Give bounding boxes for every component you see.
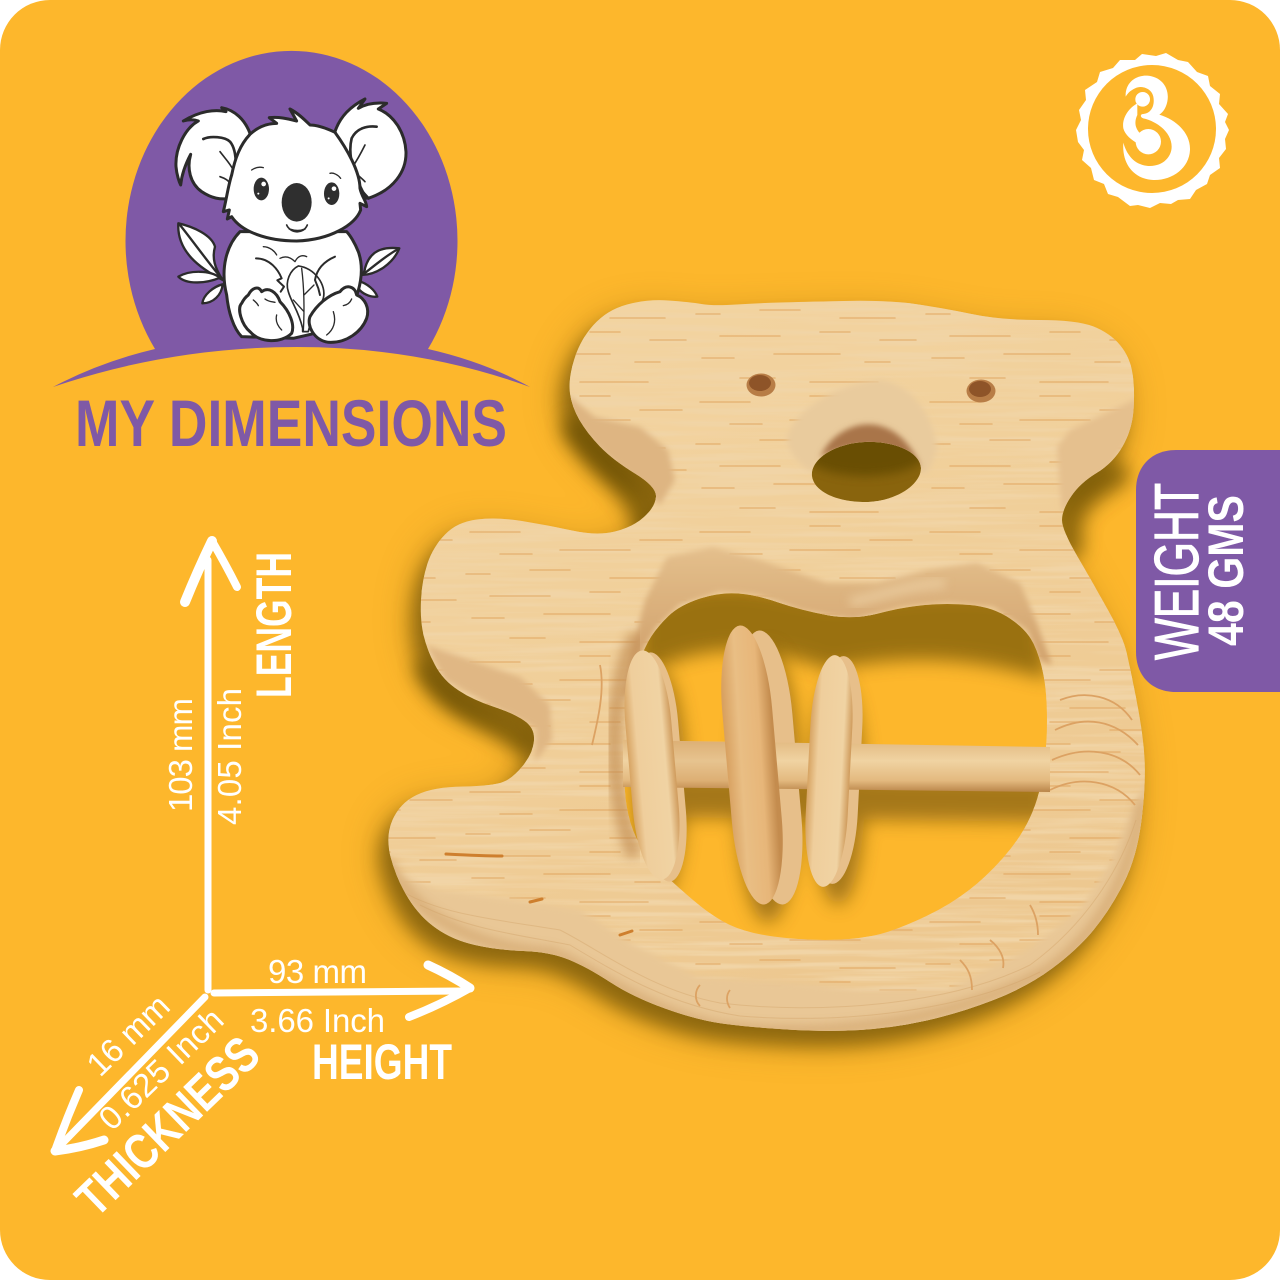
right ear: [335, 99, 406, 198]
grain dashes: [388, 309, 1142, 991]
mouth: [287, 225, 307, 232]
hole top wall highlight: [850, 583, 945, 602]
wood surface details: [380, 295, 1165, 1050]
lower rim wall: [390, 786, 1144, 1031]
label: height: HEIGHT: [312, 1034, 452, 1090]
value: 103 mm: 103 mm: [162, 698, 199, 812]
disc middle: [715, 623, 789, 907]
value: 4.05 Inch: 4.05 Inch: [211, 688, 248, 825]
logo numeral mark: [1123, 76, 1190, 180]
body: [224, 232, 361, 338]
dark grain marks: [446, 854, 632, 935]
rattle: [619, 623, 1050, 907]
inner ear lines: [203, 126, 377, 198]
toy body: [388, 300, 1145, 1031]
arrow: length: [185, 541, 237, 990]
nose inner wall: [820, 424, 921, 468]
heading: MY DIMENSIONS: [75, 386, 507, 460]
disc left: [619, 648, 685, 882]
disc right: [802, 654, 856, 888]
purple dome with swoosh: [53, 51, 530, 387]
product: wooden koala rattle: [379, 295, 1165, 1050]
hole left shading: [614, 640, 634, 850]
logo: [1076, 53, 1229, 208]
logo rough ring: [1076, 53, 1229, 208]
rim wall lower shading: [388, 800, 1142, 1030]
tab background: [1136, 450, 1280, 692]
head left wall: [568, 395, 675, 505]
head: [223, 109, 367, 241]
value: 3.66 Inch: 3.66 Inch: [250, 1002, 385, 1039]
weight value: 48 GMS: [1198, 495, 1254, 646]
center leaf: [287, 266, 324, 332]
rod darker segment: [672, 741, 728, 788]
axis diagram: [55, 541, 470, 1227]
arrow: height: [214, 965, 470, 1017]
soft toy shadow: [380, 312, 1137, 1043]
value: 93 mm: 93 mm: [268, 953, 367, 990]
hole yellow backing: [620, 570, 1050, 950]
value: 0.625 Inch: 0.625 Inch: [91, 1001, 231, 1137]
leaves: [178, 223, 399, 303]
arm and chest lines: [256, 247, 335, 332]
head right wall: [1057, 398, 1138, 512]
icon: koala: [176, 99, 406, 342]
rod: [623, 740, 1050, 792]
left ear: [176, 108, 250, 199]
eyes: [254, 178, 339, 205]
toe lines: [253, 299, 352, 335]
undercut shadows: [425, 430, 1115, 745]
value: 16 mm: 16 mm: [79, 987, 177, 1083]
ring growth arcs: [592, 665, 1140, 1008]
tight toy shadow: [379, 316, 1136, 1047]
label: length: LENGTH: [246, 552, 302, 698]
grain streaks: [380, 295, 1160, 1040]
eye holes: [746, 374, 996, 402]
right foot: [309, 287, 368, 342]
rim wall lines: [400, 820, 1136, 1018]
rattle shadow: [634, 647, 1050, 923]
left foot: [240, 288, 293, 341]
logo inner disc: [1088, 65, 1216, 193]
label: thickness: THICKNESS: [65, 1025, 271, 1227]
nose bevel: [787, 380, 937, 474]
hole top wall: [622, 547, 1052, 700]
brows: [252, 167, 341, 178]
eye highlights: [257, 182, 336, 199]
nose: [282, 183, 312, 222]
arrow: thickness: [55, 997, 205, 1151]
body left wall: [426, 645, 552, 762]
weight label: WEIGHT: [1143, 483, 1212, 660]
weight tab: [1136, 450, 1280, 692]
back discs: [628, 628, 866, 907]
nose hole shadow: [803, 428, 927, 476]
hole shadow: [636, 584, 1048, 680]
koala badge: [53, 51, 530, 460]
